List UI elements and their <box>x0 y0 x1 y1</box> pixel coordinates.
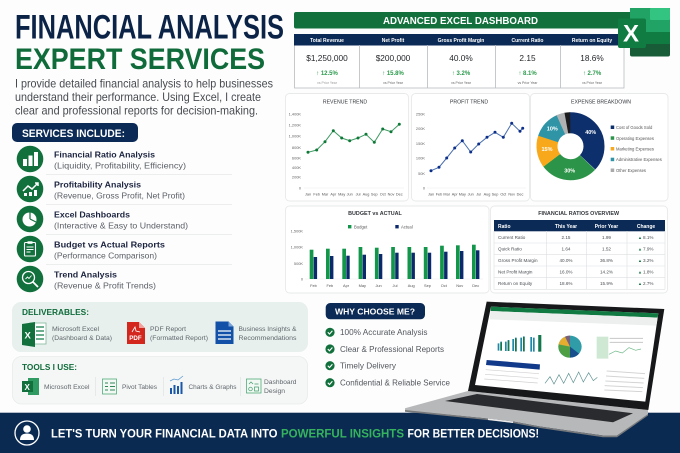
donut labels: 30% <box>564 169 575 175</box>
kpi: return on equity: Return on Equity <box>572 38 612 44</box>
panel: expense breakdown <box>530 94 668 201</box>
tool: pivot tables <box>102 379 157 394</box>
revenue y axis labels: 1,200K <box>289 122 301 128</box>
profit month labels: Jan <box>428 192 434 196</box>
revenue month labels: Mar <box>322 192 329 196</box>
budget month labels: Oct <box>441 283 448 288</box>
kpi: total revenue: $1,250,000 <box>306 53 348 63</box>
mini pie chart <box>558 336 582 358</box>
kpi: net profit: $200,000 <box>376 53 411 63</box>
budget month labels: Feb <box>310 283 317 288</box>
profit y axis labels: 50K <box>418 171 425 176</box>
deliverable: excel text: Microsoft Excel <box>52 326 99 333</box>
icon: document <box>216 322 234 344</box>
kpi: total revenue: ↑ 12.5% <box>316 71 339 77</box>
budget month labels: Aug <box>408 283 415 288</box>
ratios table rows: 18.6% <box>559 281 573 286</box>
icon: excel file <box>22 322 46 347</box>
title <box>15 8 284 76</box>
kpi: total revenue: Total Revenue <box>310 38 344 44</box>
revenue y axis labels: 1,400K <box>289 112 301 116</box>
deliverable: pdf text: PDF Report <box>150 326 186 333</box>
budget legend <box>348 224 413 229</box>
deliverable: insights text <box>238 326 297 342</box>
kpi: gross profit margin <box>438 38 484 85</box>
ratios table header: Ratio <box>498 224 510 230</box>
kpi: net profit: ↑ 15.8% <box>382 71 405 77</box>
ratios table rows: ▲ <box>638 281 642 286</box>
actual bars <box>314 250 479 279</box>
panel: revenue trend <box>286 94 408 201</box>
intro text: understand their performance. Using Excel, I create <box>15 91 261 104</box>
service: budget vs actual reports: (Performance Comparison) <box>54 251 157 261</box>
ratios table header <box>494 220 665 231</box>
kpi: gross profit margin: ↑ 3.2% <box>452 71 471 77</box>
panel: revenue trend: REVENUE TREND <box>323 100 367 106</box>
donut legend: Other Expenses <box>616 168 646 173</box>
tool: dashboard design: Dashboard <box>264 379 297 386</box>
deliverable: pdf text <box>150 326 208 342</box>
ratios table rows: 15.9% <box>600 281 613 286</box>
ratios table header: This Year <box>555 224 577 230</box>
donut labels: 10% <box>547 126 558 132</box>
budget y axis labels: 1,000K <box>291 244 303 250</box>
ratios table rows: 3.2% <box>643 258 653 263</box>
kpi: current ratio: Current Ratio <box>512 38 543 44</box>
budget month labels: Sep <box>424 283 431 288</box>
tool: charts and graphs <box>170 376 236 394</box>
footer text <box>51 428 539 440</box>
mini green table and line <box>597 337 643 359</box>
donut legend: Marketing Expenses <box>616 146 654 152</box>
profit month labels: Aug <box>484 192 490 196</box>
icon: excel logo: X <box>623 20 639 48</box>
profit y axis labels: 200K <box>416 126 425 131</box>
tool: microsoft excel: X <box>24 383 30 392</box>
ratios table rows: Gross Profit Margin <box>498 258 538 263</box>
check item: accurate: 100% Accurate Analysis <box>340 328 428 337</box>
ratios table rows: ▲ <box>638 258 642 263</box>
kpi: current ratio <box>512 38 543 85</box>
laptop base <box>405 391 648 437</box>
revenue month labels: Jan <box>305 192 311 196</box>
deliverable: insights text: Business Insights & <box>238 326 297 333</box>
revenue y axis labels: 1,000K <box>289 134 301 138</box>
ratios table rows: 2.15 <box>562 235 571 240</box>
ratios table rows: Return on Equity <box>498 281 533 286</box>
revenue y axis labels: 600K <box>292 156 301 160</box>
tool: pivot tables: Pivot Tables <box>122 384 157 391</box>
dashboard header: ADVANCED EXCEL DASHBOARD <box>383 16 538 27</box>
deliverable: excel text: (Dashboard & Data) <box>52 335 112 342</box>
ratios table rows: 1.64 <box>562 246 571 252</box>
ratios table rows: 16.0% <box>559 270 573 274</box>
profit y axis labels <box>416 112 426 190</box>
profit month labels: May <box>459 192 466 196</box>
service: profitability analysis <box>17 176 185 202</box>
ratios table rows: ▲ <box>638 246 642 252</box>
icon: excel file: X <box>24 330 32 342</box>
mini side table <box>604 371 645 392</box>
budget month labels: Nov <box>456 283 463 288</box>
profit month labels: Sep <box>492 192 498 196</box>
panel: financial ratios overview: FINANCIAL RATIOS OVERVIEW <box>538 211 620 217</box>
donut legend <box>611 125 662 173</box>
budget legend: Budget <box>354 224 368 229</box>
kpi: net profit: Net Profit <box>382 38 405 44</box>
kpi: current ratio: 2.15 <box>519 53 536 63</box>
revenue month labels: Feb <box>313 192 320 196</box>
service: budget vs actual reports: Budget vs Actual Reports <box>54 239 165 249</box>
service: excel dashboards <box>17 206 188 232</box>
deliverable: insights text: Recommendations <box>238 335 296 342</box>
revenue month labels: Aug <box>363 192 369 196</box>
service: budget vs actual reports <box>17 236 165 262</box>
donut legend: Cost of Goods Sold <box>616 125 653 130</box>
ratios table rows: 8.1% <box>643 235 653 240</box>
services heading <box>12 123 138 142</box>
ratios table header: Prior Year <box>595 224 618 230</box>
budget y axis labels: 500K <box>294 261 303 266</box>
revenue y axis labels: 0 <box>299 186 302 190</box>
kpi: net profit: vs Prior Year <box>383 81 404 85</box>
profit month labels: Mar <box>443 192 451 196</box>
service: profitability analysis: (Revenue, Gross Profit, Net Profit) <box>54 191 185 201</box>
mini line chart <box>545 372 597 384</box>
why choose me <box>325 303 450 388</box>
revenue month labels: Apr <box>330 192 337 196</box>
revenue month labels: Jul <box>356 192 361 196</box>
ratios table rows: Quick Ratio <box>498 246 522 252</box>
laptop <box>405 302 664 437</box>
intro text: I provide detailed financial analysis to help businesses <box>15 78 273 90</box>
ratios table header: Change <box>637 224 655 230</box>
revenue month labels: Sep <box>371 192 378 196</box>
intro text: clear and professional reports for decision-making. <box>15 104 258 118</box>
kpi: net profit <box>376 38 411 85</box>
check item: reports: Clear & Professional Reports <box>340 345 444 354</box>
check item: confidential: Confidential & Reliable Service <box>340 379 450 388</box>
budget month labels: Dec <box>472 283 479 288</box>
tool: charts and graphs: Charts & Graphs <box>188 384 236 391</box>
budget month labels: May <box>359 283 366 288</box>
revenue month labels: Oct <box>380 192 387 196</box>
footer text: POWERFUL INSIGHTS <box>281 428 404 440</box>
kpi: return on equity <box>572 38 612 85</box>
footer banner <box>0 413 680 453</box>
kpi: return on equity: vs Prior Year <box>582 81 603 85</box>
ratios table rows: Net Profit Margin <box>498 270 533 274</box>
panel: tools <box>12 356 308 404</box>
revenue y axis labels <box>289 112 302 190</box>
revenue y axis labels: 400K <box>292 165 301 170</box>
deliverable: pdf text: (Formatted Report) <box>150 335 208 342</box>
tool: dashboard design: Design <box>264 388 285 395</box>
donut labels: 15% <box>541 147 553 153</box>
panel: budget vs actual: BUDGET vs ACTUAL <box>348 211 403 217</box>
panel: deliverables <box>12 302 308 352</box>
service: trend analysis: (Revenue & Profit Trends) <box>54 281 156 291</box>
icon: pdf file <box>127 322 145 344</box>
tool: microsoft excel <box>22 378 90 395</box>
profit month labels <box>428 192 523 196</box>
icon: person <box>15 421 39 445</box>
profit month labels: Apr <box>452 192 458 196</box>
donut labels <box>541 126 596 175</box>
kpi: current ratio: ↑ 8.1% <box>518 71 537 77</box>
service: trend analysis <box>17 266 156 292</box>
donut chart <box>537 113 604 179</box>
tool: microsoft excel: Microsoft Excel <box>44 384 90 391</box>
footer text: LET'S TURN YOUR FINANCIAL DATA INTO <box>51 428 278 440</box>
donut legend: Administrative Expenses <box>616 157 662 162</box>
dashboard header <box>294 12 632 28</box>
panel: financial ratios overview <box>490 206 668 293</box>
panel: budget vs actual <box>286 206 489 293</box>
budget y axis labels <box>291 228 304 282</box>
mini bar chart <box>498 335 541 352</box>
kpi table <box>294 34 624 88</box>
mini data table <box>484 360 540 383</box>
service: excel dashboards: (Interactive & Easy to Understand) <box>54 221 188 231</box>
service: trend analysis: Trend Analysis <box>54 269 117 279</box>
kpi: return on equity: ↑ 2.7% <box>583 71 602 77</box>
profit month labels: Nov <box>508 192 515 196</box>
ratios table rows: 14.2% <box>600 270 613 274</box>
revenue month labels: May <box>338 192 345 196</box>
service: financial ratio analysis: (Liquidity, Profitability, Efficiency) <box>54 161 186 171</box>
profit y axis labels: 100K <box>416 156 425 160</box>
service: financial ratio analysis <box>17 146 186 172</box>
budget month labels <box>310 283 479 288</box>
panel: profit trend <box>412 94 530 201</box>
kpi: total revenue: vs Prior Year <box>317 81 338 85</box>
panel: tools: TOOLS I USE: <box>22 363 77 372</box>
title: EXPERT SERVICES <box>15 43 265 76</box>
panel: expense breakdown: EXPENSE BREAKDOWN <box>571 100 631 106</box>
kpi: current ratio: vs Prior Year <box>518 81 538 85</box>
revenue y axis labels: 800K <box>292 145 301 150</box>
budget legend: Actual <box>401 224 413 229</box>
kpi: total revenue <box>306 38 348 85</box>
ratios table rows: 36.8% <box>600 258 613 263</box>
tool: dashboard design <box>246 379 297 395</box>
budget month labels: Apr <box>343 283 350 288</box>
deliverable: excel text <box>52 326 112 342</box>
kpi: gross profit margin: Gross Profit Margin <box>438 38 484 44</box>
revenue month labels: Dec <box>396 192 403 196</box>
profit month labels: Jul <box>476 192 481 196</box>
ratios table rows: 1.8% <box>643 270 653 274</box>
budget bars <box>310 245 476 279</box>
revenue y axis labels: 200K <box>292 174 301 180</box>
ratios table rows: ▲ <box>638 270 642 274</box>
budget y axis labels: 0 <box>301 276 304 282</box>
ratios table rows: 40.0% <box>559 258 573 263</box>
ratios table rows: ▲ <box>638 235 642 240</box>
profit month labels: Dec <box>517 192 523 196</box>
icon: excel logo <box>618 8 670 56</box>
profit y axis labels: 0 <box>423 186 426 190</box>
profit y axis labels: 150K <box>416 141 425 146</box>
ratios table rows <box>498 235 653 286</box>
title: FINANCIAL ANALYSIS <box>15 8 284 46</box>
ratios table rows: Current Ratio <box>498 235 526 240</box>
revenue month labels: Jun <box>347 192 353 196</box>
kpi: gross profit margin: vs Prior Year <box>451 81 472 85</box>
ratios table rows: 1.99 <box>602 235 611 240</box>
donut labels: 40% <box>585 130 596 136</box>
services list <box>17 146 188 292</box>
kpi: return on equity: 18.6% <box>580 53 604 63</box>
profit y axis labels: 250K <box>416 112 425 116</box>
ratios table rows: 2.7% <box>643 281 653 286</box>
ratios table rows: 1.52 <box>602 246 611 252</box>
budget month labels: Feb <box>326 283 333 288</box>
profit month labels: Feb <box>436 192 442 196</box>
laptop lid and screen <box>468 302 664 410</box>
panel: profit trend: PROFIT TREND <box>450 100 488 106</box>
donut legend: Operating Expenses <box>616 136 654 141</box>
budget month labels: Jun <box>375 283 382 288</box>
budget month labels: Jul <box>393 283 398 288</box>
profit line <box>430 122 524 172</box>
footer text: FOR BETTER DECISIONS! <box>408 428 539 440</box>
check item: delivery: Timely Delivery <box>340 362 396 371</box>
profit month labels: Oct <box>500 192 507 196</box>
services heading: SERVICES INCLUDE: <box>22 128 125 140</box>
service: financial ratio analysis: Financial Ratio Analysis <box>54 149 155 159</box>
budget y axis labels: 1,500K <box>291 228 303 234</box>
ratios table rows: 7.9% <box>643 246 653 252</box>
revenue month labels <box>305 192 403 196</box>
revenue line <box>306 123 401 154</box>
service: profitability analysis: Profitability Analysis <box>54 179 141 189</box>
kpi: gross profit margin: 40.0% <box>449 53 473 63</box>
icon: pdf file: PDF <box>129 335 142 342</box>
profit month labels: Jun <box>468 192 474 196</box>
why choose me: WHY CHOOSE ME? <box>335 306 415 316</box>
service: excel dashboards: Excel Dashboards <box>54 209 130 219</box>
revenue month labels: Nov <box>388 192 394 196</box>
intro text <box>15 78 273 118</box>
panel: deliverables: DELIVERABLES: <box>22 308 89 317</box>
